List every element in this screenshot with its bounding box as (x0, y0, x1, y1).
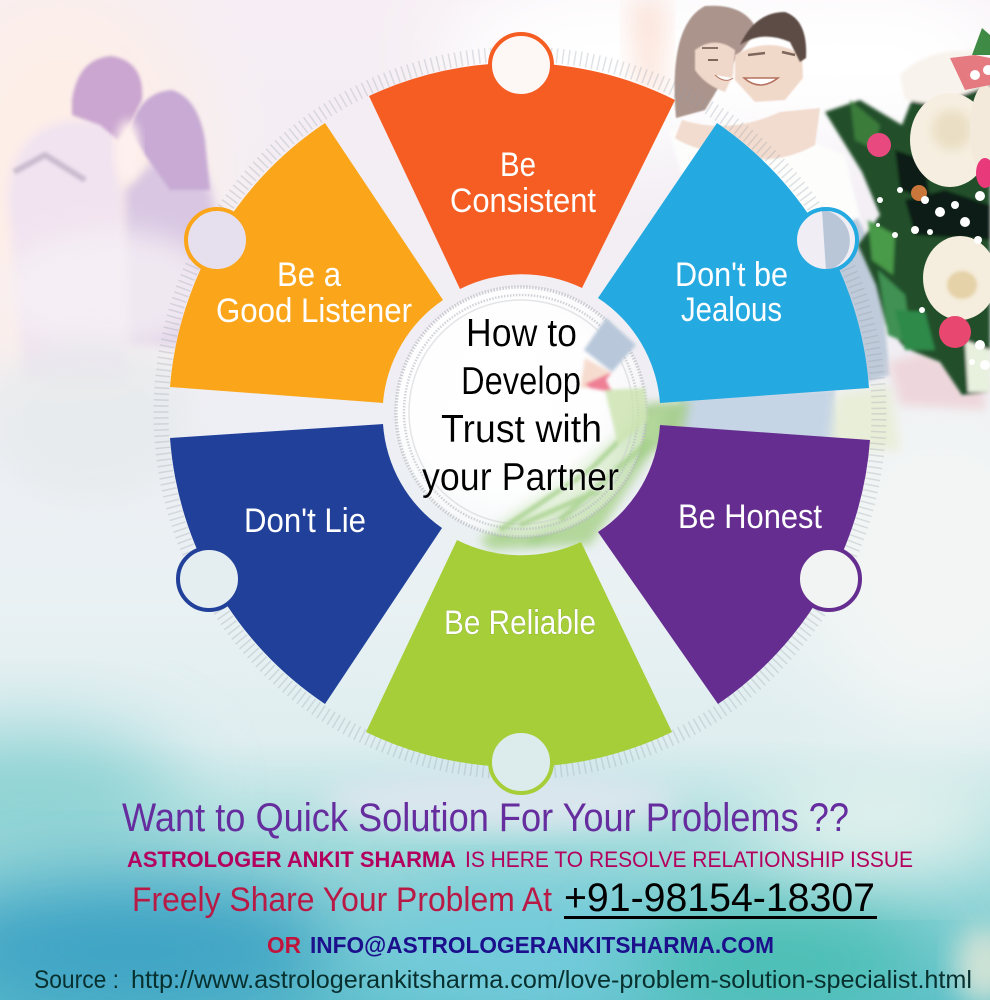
man's face (735, 45, 803, 102)
woman's face (695, 42, 735, 92)
source line: Source : (34, 966, 119, 994)
pink roses (867, 133, 891, 157)
label: Be a Good Listener (216, 256, 412, 330)
label: Be Consistent: Consistent (450, 182, 596, 220)
arms (675, 108, 820, 159)
label: Don't be Jealous: Jealous (681, 291, 782, 329)
label: Don't Lie: Don't Lie (244, 502, 366, 540)
centre title: How to (466, 312, 577, 355)
centre title (422, 312, 619, 499)
shirt lettering (14, 155, 85, 180)
lower field (830, 385, 900, 450)
source line: http://www.astrologerankitsharma.com/love-problem-solution-specialist.html (131, 966, 972, 994)
white shirt (668, 120, 862, 240)
email line: OR (267, 932, 301, 958)
woman's hair (675, 6, 757, 118)
ring: orange (490, 34, 552, 96)
photo: hugging couple top right (630, 0, 985, 450)
astrologer line: IS HERE TO RESOLVE RELATIONSHIP ISSUE (465, 847, 913, 872)
cream rose lower (923, 236, 990, 320)
label: Be a Good Listener: Good Listener (216, 292, 412, 330)
segment: Be Honest (598, 425, 870, 704)
label: Don't be Jealous (675, 256, 788, 329)
ring: purple (798, 548, 860, 610)
label: Don't be Jealous: Don't be (675, 256, 788, 294)
phone number: +91-98154-18307 (564, 876, 875, 920)
centre title: your Partner (422, 456, 619, 499)
label: Be a Good Listener: Be a (277, 256, 341, 294)
segment: Don't be Jealous (598, 123, 869, 403)
jeans (822, 218, 890, 385)
ring: blue (795, 209, 857, 271)
label: Be Consistent: Be (500, 146, 536, 184)
top leaf (972, 28, 990, 55)
share line: Freely Share Your Problem At (132, 881, 553, 919)
segment: Be Reliable (366, 540, 672, 767)
blurred shoe (888, 352, 985, 410)
ring: green (490, 731, 552, 793)
hand and sleeve (580, 318, 636, 392)
email line: INFO@ASTROLOGERANKITSHARMA.COM (310, 932, 774, 958)
label: Be Consistent (450, 146, 596, 220)
baby's breath (876, 65, 990, 370)
segment labels (216, 146, 822, 642)
astrologer line (127, 847, 913, 872)
man's shirt and woman's body (8, 118, 221, 380)
facial features (702, 48, 795, 85)
headline: Want to Quick Solution For Your Problems ?? (122, 796, 849, 840)
cream rose (910, 93, 990, 187)
woman's head (130, 90, 210, 190)
wheel segments (170, 63, 870, 767)
label: Be Honest: Be Honest (678, 498, 822, 536)
hatched outer ring (161, 54, 879, 772)
ring: navy (178, 548, 240, 610)
photo: silhouette couple on the left (0, 56, 221, 500)
man's head (72, 56, 142, 140)
astrologer line: ASTROLOGER ANKIT SHARMA (127, 847, 456, 872)
grass inside disc (500, 388, 650, 530)
centre title: Develop (461, 360, 581, 403)
photo: flower bouquet (825, 28, 990, 395)
segment: Be a Good Listener (170, 123, 443, 403)
man's hair (740, 12, 806, 62)
label: Be Reliable: Be Reliable (444, 604, 596, 642)
centre disc (396, 287, 650, 537)
ring: amber (186, 209, 248, 271)
segment: Be Consistent (369, 63, 675, 289)
segment: Don't Lie (170, 424, 442, 704)
centre title: Trust with (441, 408, 602, 451)
photo: grass through centre (480, 405, 665, 550)
